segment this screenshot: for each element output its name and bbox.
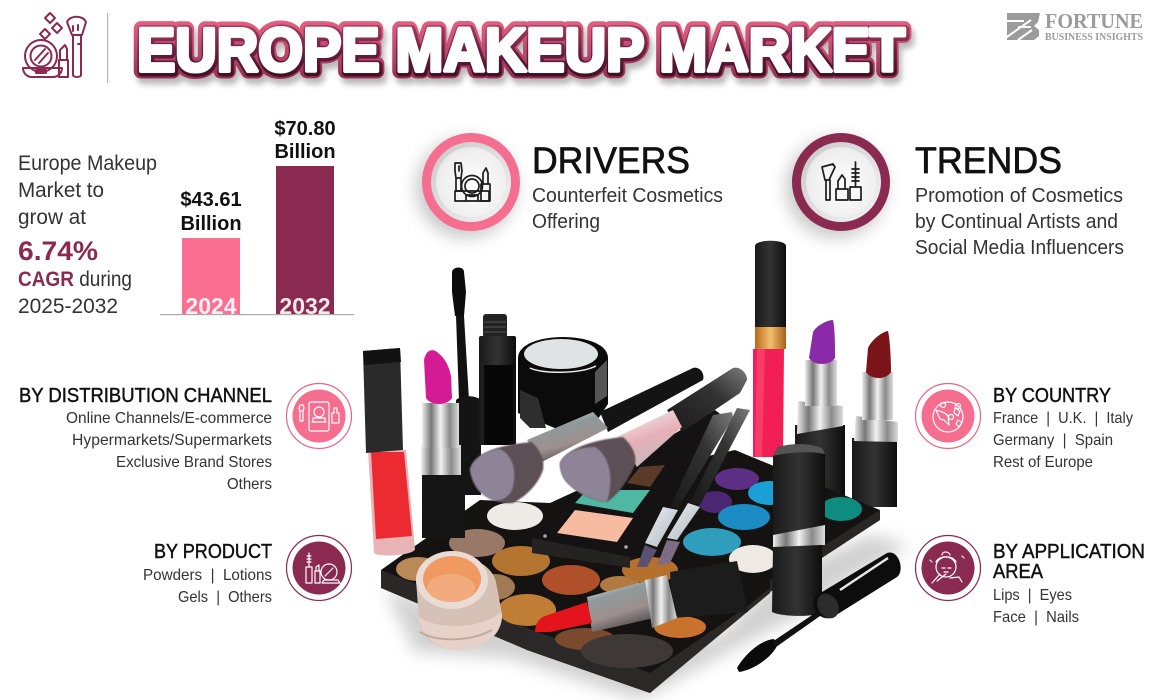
list: countries: Rest of Europe xyxy=(993,454,1093,471)
logo: Fortune Business Insights: FORTUNE xyxy=(1045,9,1143,33)
list: countries: Germany | Spain xyxy=(993,432,1113,449)
text block: CAGR statement xyxy=(18,152,157,318)
list: application areas xyxy=(993,587,1079,626)
text block: CAGR statement: 2025-2032 xyxy=(18,295,118,318)
list: countries xyxy=(993,410,1133,471)
eyeshadow pans xyxy=(396,468,862,668)
list: distribution channels: Hypermarkets/Supermarkets xyxy=(72,432,272,449)
text: trends detail: Social Media Influencers xyxy=(915,237,1124,259)
magenta lipstick xyxy=(421,350,465,538)
icon: makeup set header xyxy=(23,13,86,77)
red lip gloss xyxy=(363,348,415,556)
list: application areas: Face | Nails xyxy=(993,609,1079,626)
text block: CAGR statement: Market to xyxy=(18,179,104,202)
panel: drivers xyxy=(416,133,723,238)
logo: Fortune Business Insights: BUSINESS INSIGHTS xyxy=(1045,32,1143,43)
text: trends detail xyxy=(915,185,1124,259)
title: EUROPE MAKEUP MARKET xyxy=(138,17,906,85)
text: trends detail: by Continual Artists and xyxy=(915,211,1118,233)
heading: application area xyxy=(993,541,1145,583)
value label: 2032: $70.80 xyxy=(274,118,336,140)
panel: by application area xyxy=(916,536,1145,626)
bar chart: market size 2024 vs 2032 xyxy=(160,118,354,319)
mascara wand lying xyxy=(737,553,901,672)
standing black lipstick xyxy=(772,444,825,616)
heading: application area: AREA xyxy=(993,561,1044,583)
title: EUROPE MAKEUP MARKET xyxy=(137,16,905,84)
pink gloss xyxy=(753,241,786,457)
panel: trends xyxy=(786,133,1124,259)
panel: by country xyxy=(916,384,1133,471)
round cream jar xyxy=(518,337,608,431)
list: distribution channels xyxy=(66,410,272,493)
text: trends detail: Promotion of Cosmetics xyxy=(915,185,1123,207)
glitter powder jar xyxy=(416,551,502,650)
icon: phone with cosmetics xyxy=(286,384,352,448)
heading: product: BY PRODUCT xyxy=(154,541,272,563)
list: products: Powders | Lotions xyxy=(143,567,272,584)
icon: globe with pins xyxy=(916,384,980,448)
title: EUROPE MAKEUP MARKET xyxy=(137,16,905,84)
bar: 2024: 2024 xyxy=(185,293,237,319)
heading: country: BY COUNTRY xyxy=(993,385,1111,407)
panel: by product xyxy=(143,536,352,606)
heading: distribution channel: BY DISTRIBUTION CHANNEL xyxy=(19,385,272,407)
icon: drivers badge xyxy=(416,133,520,238)
heading: application area: BY APPLICATION xyxy=(993,541,1145,563)
text block: CAGR statement: Europe Makeup xyxy=(18,152,157,175)
list: distribution channels: Exclusive Brand Stores xyxy=(116,454,272,471)
text block: CAGR statement: 6.74% xyxy=(18,236,98,266)
list: distribution channels: Others xyxy=(227,476,272,493)
small eyeshadow brushes xyxy=(637,408,750,567)
heading: drivers: DRIVERS xyxy=(532,140,690,181)
brush two xyxy=(560,368,747,502)
list: products xyxy=(143,567,272,606)
text block: CAGR statement: CAGR during xyxy=(18,268,132,291)
bar: 2032: 2032 xyxy=(279,293,331,319)
heading: trends: TRENDS xyxy=(915,140,1062,181)
list: application areas: Lips | Eyes xyxy=(993,587,1072,604)
dark red lipstick xyxy=(852,331,898,507)
logo: Fortune Business Insights xyxy=(1004,9,1143,43)
product shadow xyxy=(385,535,910,700)
brush one xyxy=(470,368,703,503)
text: drivers detail: Offering xyxy=(532,211,600,233)
value label: 2024: $43.61 xyxy=(180,189,242,211)
divider xyxy=(107,13,108,83)
compact with blush xyxy=(532,410,728,568)
title: EUROPE MAKEUP MARKET xyxy=(140,22,908,90)
icon: face with brush xyxy=(916,536,980,600)
red lipstick lying xyxy=(535,561,748,632)
panel: by distribution channel xyxy=(19,384,352,493)
large makeup brushes xyxy=(470,368,747,503)
bar: 2024 xyxy=(182,238,240,319)
palette tray xyxy=(381,450,880,693)
text: drivers detail: Counterfeit Cosmetics xyxy=(532,185,723,207)
list: products: Gels | Others xyxy=(178,589,272,606)
text block: CAGR statement: grow at xyxy=(18,206,86,229)
value label: 2032: Billion xyxy=(274,141,336,163)
list: countries: France | U.K. | Italy xyxy=(993,410,1133,427)
icon: trends badge xyxy=(786,133,890,238)
list: distribution channels: Online Channels/E-commerce xyxy=(66,410,272,427)
text: drivers detail xyxy=(532,185,723,233)
purple lipstick xyxy=(795,320,845,510)
icon: mascara, lipstick, compact xyxy=(286,536,352,600)
mascara wand upright xyxy=(452,268,481,495)
value label: 2024: Billion xyxy=(180,213,242,235)
mascara tube xyxy=(479,314,516,445)
image: makeup products still life xyxy=(363,241,910,700)
bar: 2032 xyxy=(276,166,334,319)
